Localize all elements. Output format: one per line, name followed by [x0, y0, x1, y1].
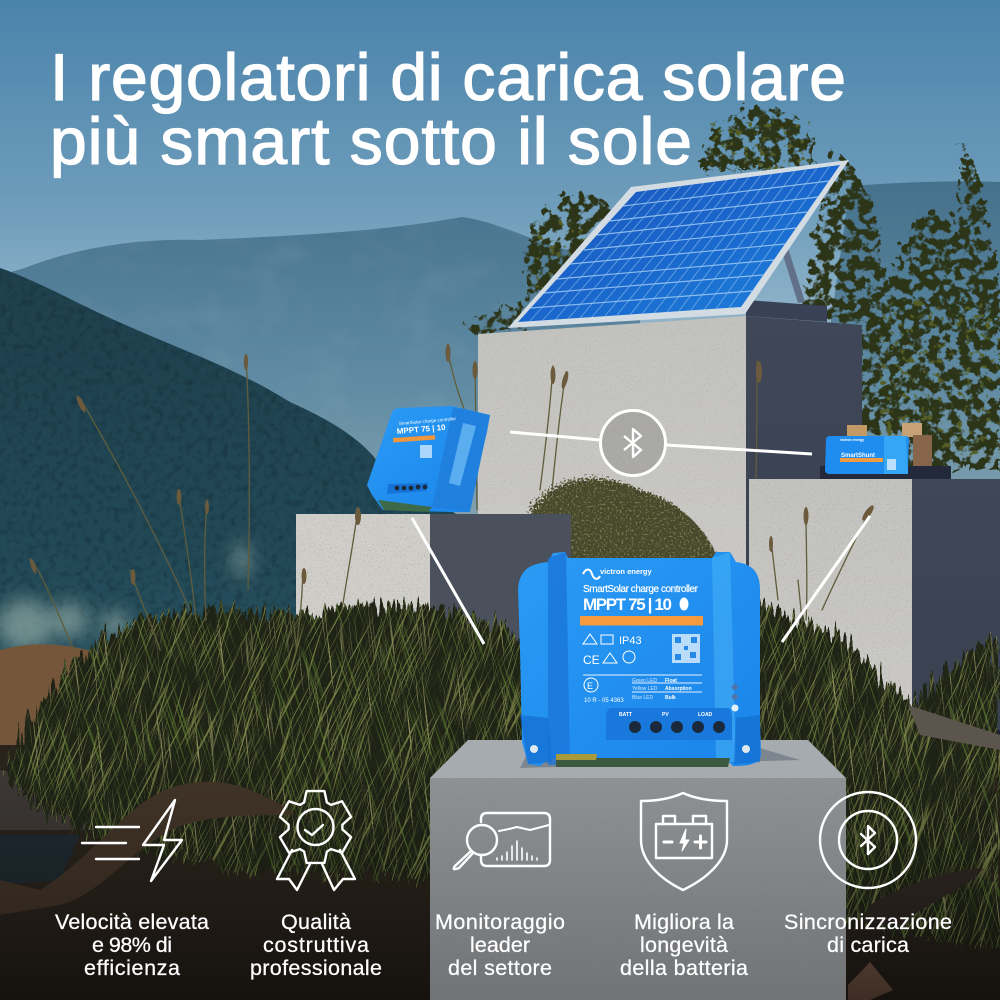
device: SmartShunt: victron energy	[840, 438, 864, 442]
feature label: sync: di carica	[827, 933, 909, 957]
feature label: monitoring: del settore	[448, 956, 552, 980]
bottom darkening	[0, 760, 1000, 1000]
feature label: quality: professionale	[250, 956, 382, 980]
near dark mountain	[0, 268, 480, 780]
solar panel	[508, 160, 849, 328]
icon: bluetooth sync	[820, 792, 916, 888]
device: main SmartSolar controller: Bulk	[665, 695, 676, 701]
feature label: quality: costruttiva	[263, 933, 369, 957]
device: main SmartSolar controller: LOAD	[698, 712, 713, 718]
device: main SmartSolar controller: E	[587, 681, 593, 691]
device: main SmartSolar controller: PV	[662, 712, 669, 718]
feature label: quality: Qualità	[281, 910, 351, 934]
feature label: battery: della batteria	[620, 956, 748, 980]
bluetooth node	[600, 410, 666, 476]
mountain haze	[0, 217, 640, 540]
icon: speed lightning	[82, 800, 182, 881]
feature label: monitoring: Monitoraggio	[435, 910, 565, 934]
feature label: sync: Sincronizzazione	[784, 910, 952, 934]
icon: quality gear with ribbon	[277, 791, 355, 890]
device: main SmartSolar controller: IP43	[619, 635, 642, 647]
block: right concrete pillar	[749, 479, 1000, 730]
device: main SmartSolar controller	[518, 552, 761, 767]
device: main SmartSolar controller: 10 R - 05 4363	[584, 698, 624, 704]
meadow grass	[5, 603, 1000, 950]
feature label: battery: Migliora la	[634, 910, 734, 934]
bushes behind solar panel	[462, 107, 1000, 470]
title	[50, 40, 846, 178]
block: back concrete pillar	[478, 316, 862, 600]
device: main SmartSolar controller: Float	[665, 678, 677, 684]
title: I regolatori di carica solare	[50, 40, 846, 114]
distant mountains	[0, 181, 1000, 540]
device: main SmartSolar controller: Absorption	[665, 686, 692, 692]
icon: battery shield	[641, 793, 727, 890]
feature label: speed: efficienza	[84, 956, 180, 980]
feature label: monitoring: leader	[470, 933, 530, 957]
feature label: speed: Velocità elevata	[55, 910, 209, 934]
feature label: battery: longevità	[640, 933, 728, 957]
device: main SmartSolar controller: SmartSolar charge controller	[583, 584, 699, 595]
device: main SmartSolar controller: CE	[583, 653, 600, 667]
grass mound between blocks	[530, 478, 725, 575]
grass stalks with seed heads	[28, 344, 876, 650]
device: main SmartSolar controller: Green LED	[632, 678, 657, 684]
device: tilted SmartSolar controller: MPPT 75 | 10	[396, 423, 446, 436]
pale trees in valley	[0, 542, 250, 651]
device: tilted SmartSolar controller	[367, 406, 490, 512]
device: SmartShunt	[820, 423, 951, 479]
device: SmartShunt: SmartShunt	[841, 453, 875, 459]
block: left concrete pillar	[296, 514, 571, 670]
device: main SmartSolar controller: MPPT 75 | 10	[583, 595, 672, 614]
title: più smart sotto il sole	[50, 104, 692, 178]
device: main SmartSolar controller: victron energy	[600, 567, 653, 576]
device: main SmartSolar controller: BATT	[619, 712, 632, 718]
driftwood log	[0, 782, 295, 915]
device: main SmartSolar controller: Blue LED	[632, 695, 654, 701]
solar panel mounting base and strut	[746, 248, 827, 322]
connector lines	[412, 432, 870, 644]
ground foreground dark	[0, 644, 1000, 1000]
block: front concrete pedestal	[430, 740, 846, 1000]
background sky	[0, 0, 1000, 520]
forest texture	[0, 268, 480, 780]
feature label: speed: e 98% di	[92, 933, 172, 957]
device: main SmartSolar controller: Yellow LED	[632, 686, 658, 692]
device: tilted SmartSolar controller: SmartSolar charge controller	[399, 416, 457, 426]
rocks and logs right	[848, 705, 1000, 1000]
icon: monitoring magnifier and chart	[454, 813, 550, 869]
